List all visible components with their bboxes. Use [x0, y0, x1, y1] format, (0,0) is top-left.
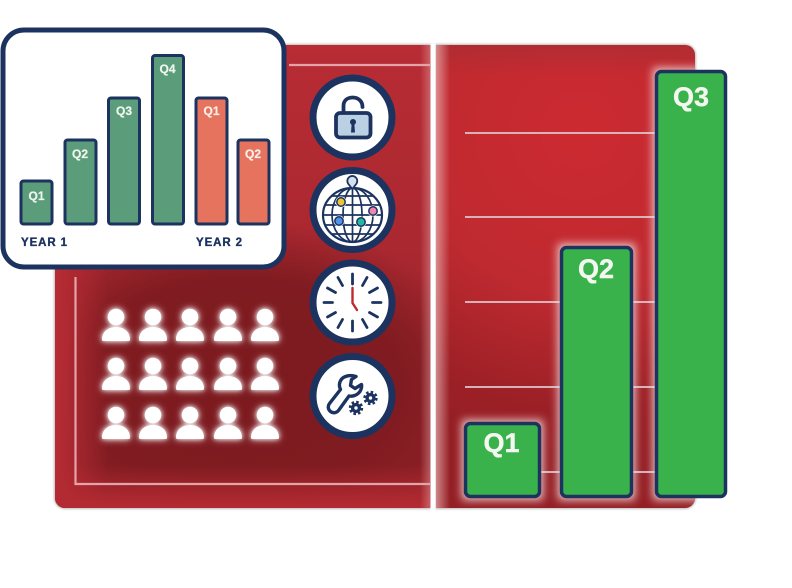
bar: Q1: Q1 — [483, 428, 520, 458]
bar: year 2 Q1 — [196, 98, 227, 224]
panel: red background left — [54, 44, 431, 509]
icon: open padlock — [313, 78, 392, 157]
icon: clock — [313, 263, 392, 342]
bar: year 1 Q1: Q1 — [28, 189, 45, 203]
bar: year 2 Q1: Q1 — [203, 104, 220, 118]
label: year 1: YEAR 1 — [21, 237, 68, 249]
horizontal grid lines — [465, 133, 655, 472]
icon: globe with location pins — [313, 170, 392, 250]
label: year 2: YEAR 2 — [196, 237, 243, 249]
icon: wrench and gears — [313, 356, 392, 436]
bar: year 2 Q2 — [238, 140, 269, 224]
bar: Q1 — [466, 424, 540, 496]
bar chart: quarterly green bars — [462, 68, 726, 500]
bar: year 1 Q4: Q4 — [159, 62, 176, 76]
bar: year 1 Q3 — [108, 98, 140, 224]
map pins — [334, 196, 378, 228]
bar: Q3 — [656, 72, 726, 496]
bar: year 1 Q4 — [152, 56, 184, 224]
panel: two-year chart card — [3, 30, 284, 267]
panel: red background right — [435, 44, 696, 509]
frame lines of left panel — [76, 65, 430, 484]
white vertical divider — [430, 44, 436, 510]
bar: year 2 Q2: Q2 — [245, 147, 261, 161]
bar: Q2: Q2 — [578, 254, 614, 284]
people icon grid — [102, 309, 279, 439]
bar: year 1 Q1 — [21, 181, 52, 224]
bar: year 1 Q2 — [65, 140, 96, 224]
bar: Q3: Q3 — [673, 82, 709, 112]
bar: year 1 Q2: Q2 — [72, 147, 88, 161]
bar: year 1 Q3: Q3 — [116, 104, 132, 118]
bar: Q2 — [562, 248, 632, 496]
